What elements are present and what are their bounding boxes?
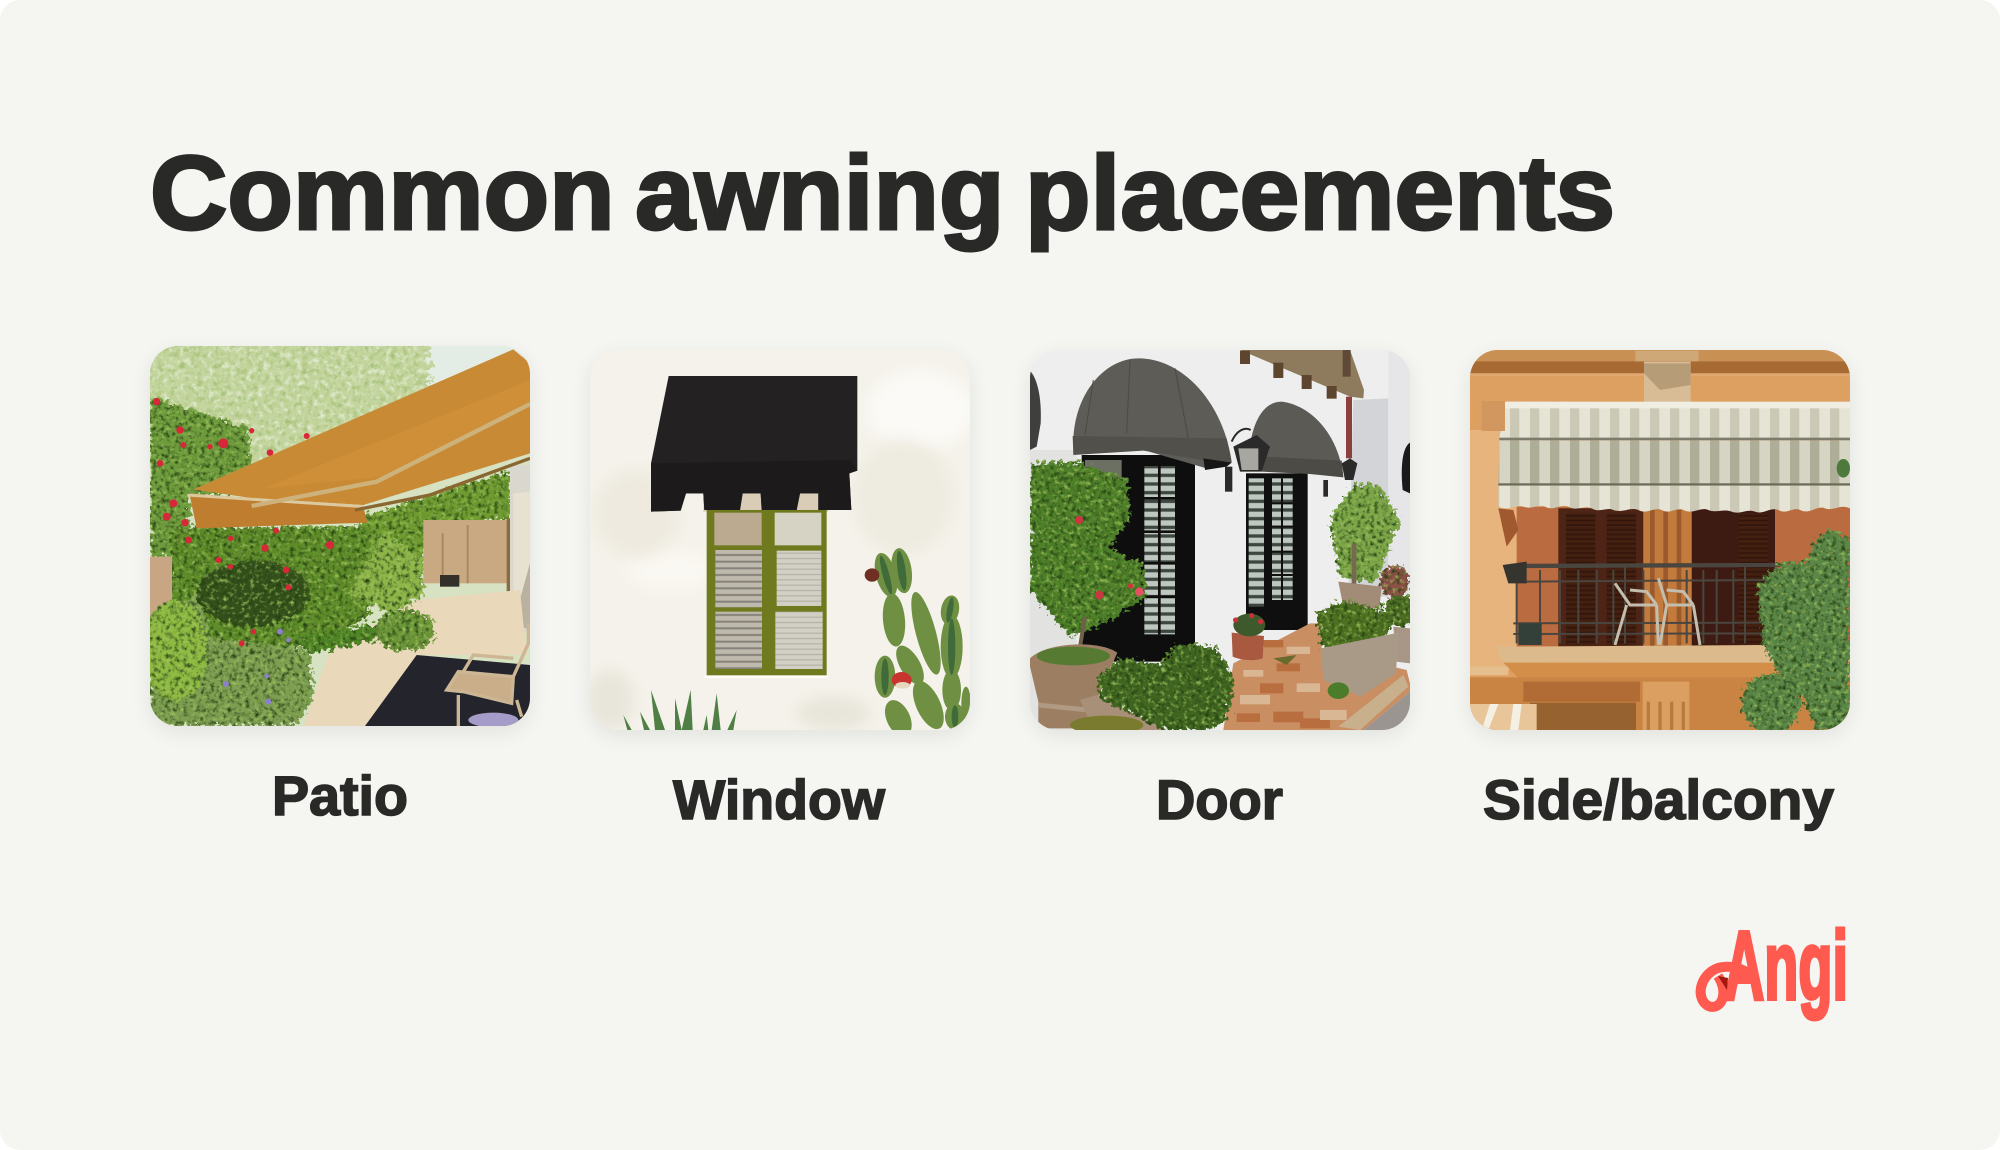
balcony slab (1496, 645, 1783, 663)
left door (1082, 455, 1195, 662)
left awning (1073, 358, 1232, 468)
logo: Angi: Angi (1724, 911, 1848, 1020)
shrubs (1095, 643, 1235, 730)
shutters (1558, 508, 1643, 648)
planter boxes (1382, 595, 1418, 627)
label: Window: Window (673, 768, 885, 831)
balcony rail (1510, 565, 1780, 643)
cactus (874, 548, 970, 730)
panel: window (587, 350, 973, 831)
photo: window awning (587, 350, 973, 741)
photo: balcony awning (1470, 350, 1850, 733)
red flowers (153, 398, 334, 646)
tree (1757, 530, 1850, 730)
right door (1246, 473, 1308, 630)
patio tiles (1223, 623, 1410, 730)
label: Door: Door (1156, 768, 1283, 831)
panel: door (1030, 350, 1418, 831)
flower pot (1232, 633, 1264, 660)
panel: patio (143, 340, 530, 827)
chairs (1615, 578, 1700, 645)
title: Common awning placements (150, 135, 1615, 252)
front pot (1030, 644, 1117, 728)
panel: side/balcony (1470, 350, 1850, 831)
window frame (703, 492, 828, 512)
awning (1499, 402, 1850, 438)
chair (447, 623, 528, 726)
right awning (1248, 402, 1343, 477)
awning (193, 349, 530, 505)
cornice (1470, 350, 1850, 361)
black awning (651, 376, 857, 512)
agave (623, 690, 737, 730)
left tree (1030, 462, 1147, 637)
lanterns (1225, 435, 1357, 497)
label: Patio: Patio (272, 764, 408, 827)
right tree (1330, 483, 1400, 583)
photo: door awnings (1030, 350, 1418, 734)
photo: patio awning (143, 340, 530, 727)
small left awning (1030, 371, 1041, 450)
logo: Angi (1701, 911, 1848, 1020)
label: Side/balcony: Side/balcony (1483, 768, 1834, 831)
